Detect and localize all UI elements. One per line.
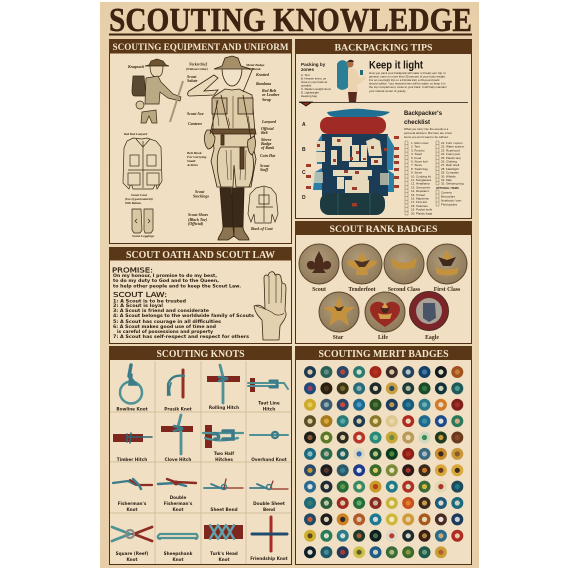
packing by zones text: D. Lightweight <box>301 90 319 94</box>
keep it light paragraph: the top compartment, close to your back. It will help maintain <box>369 85 447 89</box>
checklist items: 17. First aid <box>411 200 427 204</box>
checklist items: 12. Headlamp <box>411 182 430 186</box>
checklist items <box>405 141 465 215</box>
checklist items: 2. Tent <box>411 145 420 149</box>
knot labels: Sheet Bend <box>210 507 238 512</box>
knot labels: Timber Hitch <box>117 457 147 462</box>
equipment labels: With Buttons <box>125 201 142 205</box>
divider rule <box>299 102 468 106</box>
badge: tenderfoot: Tenderfoot <box>348 287 376 293</box>
packing by zones text: Packing by <box>301 62 326 67</box>
checklist items: 25. Plastic tarp <box>441 156 461 160</box>
checklist items: 13. Sunscreen <box>411 185 431 189</box>
merit badge grid <box>306 368 462 556</box>
checklist items: 7. Stove <box>411 163 422 167</box>
equipment labels: Strap <box>262 97 271 102</box>
checklist intro: What you carry into the woods is a <box>404 127 449 131</box>
equipment labels: Neckerchief <box>188 62 208 66</box>
equipment labels: Back of Coat <box>250 226 273 231</box>
knot labels: Hitches <box>215 457 233 462</box>
checklist items: 18. Toiletries <box>411 204 428 208</box>
illustration: backpack contents: B <box>302 147 306 153</box>
checklist items: 21. Fork / spoon <box>441 141 463 145</box>
equipment labels: Belt <box>260 130 269 135</box>
panel: backpacking tips <box>295 40 472 218</box>
heading: keep it light: Keep it light <box>369 60 423 72</box>
badge: tenderfoot <box>342 244 382 293</box>
scout law text: 5: A Scout has courage in all difficulties <box>113 319 222 324</box>
equipment labels: For Carrying <box>187 155 207 159</box>
knot labels: Bend <box>263 507 275 512</box>
illustration: back of coat <box>248 186 278 223</box>
checklist items: 9. Stove <box>411 171 422 175</box>
keep it light paragraph: general, carry no more than 30 percent of your body weight. <box>369 74 446 78</box>
checklist items: 8. Trash bag <box>411 167 428 171</box>
packing by zones text: B. Heavier items, as <box>301 76 327 80</box>
equipment labels: Salute <box>187 78 198 83</box>
packing by zones text <box>301 62 331 98</box>
badge: life: Life <box>378 335 388 341</box>
checklist items: 5. Food <box>411 156 422 160</box>
checklist items: 28. Flashlight <box>441 167 459 171</box>
keep it light paragraph: For an overnight trip on a Florida trail, a 20-pound pack <box>369 78 440 82</box>
equipment labels <box>124 62 280 238</box>
badge: star: Star <box>333 335 344 341</box>
checklist items: 20. Plastic bags <box>411 211 433 215</box>
illustration: backpack contents: C <box>302 170 306 176</box>
scout law text: 1: A Scout is to be trusted <box>113 298 186 304</box>
knot labels: Rolling Hitch <box>209 405 239 410</box>
equipment labels: Official <box>261 126 274 131</box>
checklist items: 27. Rain shell <box>441 163 460 167</box>
keep it light paragraph <box>369 71 447 93</box>
equipment labels: Scout Axe <box>187 111 204 116</box>
illustration: backpack contents: A <box>302 122 306 128</box>
checklist items: 22. Water system <box>441 145 465 149</box>
checklist items: 10. Cooking kit <box>411 174 431 178</box>
knot labels: Two Half <box>214 451 234 456</box>
checklist items: 11. Sunglasses <box>411 178 432 182</box>
equipment labels: Bandana <box>255 81 271 86</box>
illustration: main saluting scout <box>188 56 256 240</box>
heading: equipment <box>109 39 292 54</box>
equipment labels: Scout <box>195 189 205 194</box>
illustration: backpack contents: D <box>302 195 306 201</box>
knot labels: Knot <box>172 507 184 512</box>
heading: oath: SCOUT OATH AND SCOUT LAW <box>126 250 275 261</box>
keep it light paragraph: How you pack your backpack will make or break your trip. In <box>369 71 446 75</box>
promise text: On my honour, I promise to do my best, <box>113 273 217 278</box>
packing by zones text: zones <box>301 67 314 72</box>
equipment labels: Articles <box>186 163 199 167</box>
heading: merit: SCOUTING MERIT BADGES <box>318 349 449 360</box>
checklist intro <box>404 127 453 139</box>
heading: backpacker's checklist: checklist <box>404 120 430 126</box>
scout law text: 2: A Scout is loyal <box>113 303 164 308</box>
equipment labels: Stockings <box>193 194 209 198</box>
packing by zones text: A. Tent <box>301 73 310 77</box>
checklist items: 23. Rope/cord <box>441 148 460 152</box>
knot labels: Knot <box>218 557 230 562</box>
badge: star <box>319 292 359 341</box>
promise text: PROMISE: <box>112 266 153 274</box>
badge: life <box>365 292 405 341</box>
illustration: hiker <box>337 60 366 102</box>
heading: knots <box>109 346 292 360</box>
packing by zones text: C. Medium weight items <box>301 87 331 91</box>
checklist items: 24. Foam pad <box>441 152 460 156</box>
illustration: backpack contents <box>302 109 399 215</box>
promise text: to help other people and to keep the Scout Law. <box>113 284 241 288</box>
checklist items: 4. Towel <box>411 152 422 156</box>
equipment labels: Coin Hat <box>260 153 276 158</box>
illustration: scout coat <box>123 138 162 189</box>
knot labels: Double Sheet <box>253 501 285 506</box>
checklist items: 6. Stove fuel <box>411 160 428 164</box>
heading: rank: SCOUT RANK BADGES <box>330 225 438 235</box>
illustration: scout with backpack <box>132 59 183 123</box>
heading: backpacking <box>295 40 472 54</box>
knot labels <box>116 400 288 562</box>
equipment labels: (Official) <box>188 221 204 226</box>
scout law text: 7: A Scout has self-respect and respect for others <box>113 334 250 339</box>
equipment labels: Scout <box>187 74 197 79</box>
panel: equipment and uniform <box>109 39 292 244</box>
title: SCOUTING KNOWLEDGE <box>109 2 472 39</box>
promise text: to do my duty to God and to the Queen, <box>113 278 219 283</box>
checklist items: OPTIONAL ITEMS <box>436 186 459 190</box>
panel: scout rank badges <box>295 221 472 344</box>
knot labels: Friendship Knot <box>250 556 288 561</box>
knot labels: Fisherman's <box>164 501 193 506</box>
equipment labels: Scout Shoes <box>188 212 209 217</box>
knot labels: Clove Hitch <box>165 457 191 462</box>
equipment labels: (Without Collar) <box>186 67 208 71</box>
knot labels: Double <box>170 495 186 500</box>
heading: backpacking: BACKPACKING TIPS <box>334 44 432 54</box>
checklist items: 19. Pocket knife <box>411 208 433 212</box>
knot labels: Knot <box>126 557 138 562</box>
illustration: leggings <box>132 209 153 233</box>
equipment labels: Lanyard <box>261 119 277 124</box>
checklist items: 1. Rain cover <box>411 141 429 145</box>
poster background <box>100 2 479 568</box>
equipment labels: Badge <box>260 141 272 146</box>
equipment labels: Belt Hook <box>186 151 202 155</box>
heading: oath <box>109 247 292 261</box>
packing by zones text: sleeping bag <box>301 94 317 98</box>
equipment labels: Metal Badge <box>245 63 265 67</box>
scout law text: 3: A Scout is friend and considerate <box>113 308 209 313</box>
keep it light paragraph: your natural center of gravity. <box>369 89 406 93</box>
promise text <box>112 266 241 288</box>
badge: second class <box>384 244 424 293</box>
badge: second class: Second Class <box>388 287 421 293</box>
heading: backpacker's checklist <box>404 111 443 126</box>
scout law text <box>113 291 255 339</box>
scout law text: 6: A Scout makes good use of time and <box>113 324 216 329</box>
scout law text: is careful of possessions and property <box>117 329 213 334</box>
equipment labels: Scout <box>260 163 270 168</box>
knot labels: Sheepshank <box>164 551 193 556</box>
badge: first class <box>427 244 467 293</box>
panel: scout oath and law <box>109 247 292 344</box>
badge: first class: First Class <box>434 287 461 293</box>
equipment labels: (Black Toe) <box>188 217 208 222</box>
equipment labels: Sleeve <box>261 137 272 142</box>
knot labels: Fisherman's <box>118 501 147 506</box>
badge: eagle <box>410 292 448 341</box>
checklist items: Binoculars <box>441 194 456 198</box>
checklist items: Camera <box>441 190 452 194</box>
equipment labels: Canteen <box>188 121 203 126</box>
keep it light paragraph: should suffice. Your heaviest item will be water, so keep it in <box>369 82 446 86</box>
knot labels: Prusik Knot <box>164 406 192 412</box>
heading: merit <box>295 346 472 360</box>
checklist items: 29. Compass <box>441 171 459 175</box>
checklist items: 30. Whistle <box>441 174 456 178</box>
scout law text: 4: A Scout belongs to the worldwide family of Scouts <box>113 313 255 318</box>
knot labels: Knot <box>126 507 138 512</box>
knot labels: Bowline Knot <box>116 406 148 412</box>
equipment labels: Scout Coat <box>131 193 148 197</box>
badge: scout <box>299 244 339 293</box>
equipment labels: of Rank <box>249 67 261 71</box>
illustration: scout salute hand <box>254 272 286 340</box>
heading: backpacker's checklist: Backpacker's <box>404 111 443 117</box>
equipment labels: or Leather <box>262 92 280 97</box>
panel: scouting knots <box>109 346 292 564</box>
knot labels: Square (Reef) <box>116 551 148 556</box>
checklist items: 26. Clothing <box>441 160 457 164</box>
checklist items: 15. Trowel <box>411 193 425 197</box>
knot labels: Overhand Knot <box>251 457 287 462</box>
checklist items: Field guides <box>441 202 458 206</box>
equipment labels: Scout Leggings <box>132 234 155 238</box>
checklist intro: personal decision. But here are a few <box>404 131 453 135</box>
heading: rank <box>295 221 472 235</box>
heading: equipment: SCOUTING EQUIPMENT AND UNIFORM <box>112 43 289 53</box>
badge: scout: Scout <box>312 287 326 293</box>
equipment labels: Red Bob Lanyard <box>124 132 148 136</box>
panel: scouting merit badges <box>295 346 472 564</box>
checklist items: Notebook / pen <box>441 198 462 202</box>
packing by zones text: close to your back as <box>301 80 328 84</box>
equipment labels: Red Belt <box>262 88 277 93</box>
checklist items: 32. Sleeping bag <box>441 182 464 186</box>
checklist items: 3. Poncho <box>411 148 425 152</box>
knot diagrams <box>112 365 288 551</box>
equipment labels: Small <box>187 159 195 163</box>
knot labels: Turk's Head <box>210 551 238 556</box>
scout law text: SCOUT LAW: <box>113 291 167 299</box>
badge: eagle: Eagle <box>425 335 439 341</box>
equipment labels: of Rank <box>261 145 274 150</box>
checklist items: 14. Repellent <box>411 189 429 193</box>
knot labels: Hitch <box>263 406 275 412</box>
heading: knots: SCOUTING KNOTS <box>156 349 245 360</box>
checklist items: 31. Map <box>441 178 452 182</box>
equipment labels: Staff <box>260 167 269 172</box>
knot labels: Taut Line <box>258 400 280 406</box>
equipment labels: Knapsack <box>127 64 144 69</box>
equipment labels: (Use of good material) <box>125 197 153 201</box>
equipment labels: Knotted <box>255 72 270 77</box>
checklist intro: items you won't want to be without: <box>404 135 449 139</box>
checklist items: 16. Maps/nav <box>411 196 430 200</box>
knot labels: Knot <box>172 557 184 562</box>
packing by zones text: possible <box>301 84 312 88</box>
